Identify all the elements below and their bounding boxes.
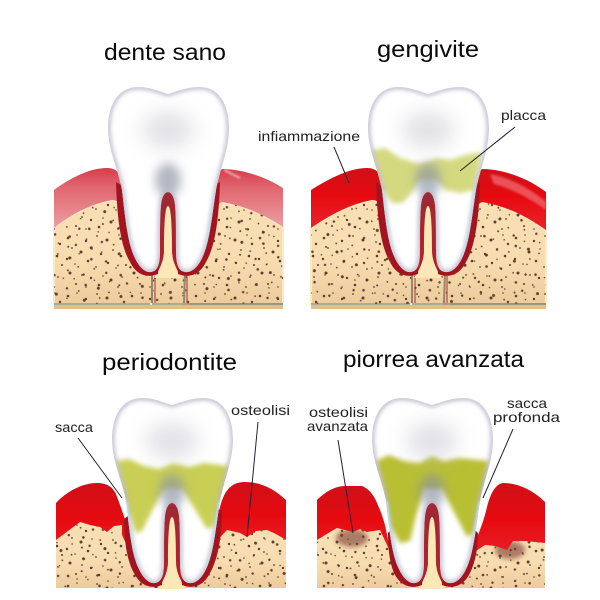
- base band: [311, 304, 546, 309]
- label: osteolisi: osteolisi: [231, 402, 290, 418]
- tooth: [108, 87, 229, 278]
- panel: gengivite: [258, 36, 546, 309]
- label: placca: [460, 107, 546, 171]
- label: infiammazione: [258, 128, 360, 183]
- nerve lines: [311, 272, 546, 304]
- heading: piorrea avanzata: piorrea avanzata: [343, 346, 524, 372]
- label: osteolisi avanzata: osteolisi: [309, 404, 368, 420]
- panel: periodontite: [55, 349, 290, 589]
- heading: gengivite: gengivite: [377, 36, 479, 62]
- inflamed gum left: [311, 168, 388, 228]
- gum glint: [224, 170, 240, 178]
- label: sacca: sacca: [55, 419, 93, 435]
- heading: dente sano: dente sano: [104, 39, 226, 65]
- bone lesion right: [495, 541, 525, 559]
- gum right: [466, 483, 545, 562]
- heading: periodontite: periodontite: [102, 349, 237, 375]
- label: placca: placca: [501, 107, 546, 123]
- label: sacca profonda: profonda: [493, 409, 560, 425]
- tooth with plaque: [112, 398, 233, 589]
- label: sacca profonda: [483, 395, 560, 498]
- bone: [56, 522, 286, 588]
- gum highlight: [490, 174, 546, 210]
- label: osteolisi avanzata: avanzata: [307, 418, 368, 434]
- bone lesion left: [336, 529, 368, 547]
- label: sacca: [55, 419, 122, 498]
- gum left: [54, 168, 128, 228]
- bone: [311, 200, 546, 304]
- bone: [54, 200, 283, 304]
- panel: dente sano: [54, 39, 283, 309]
- label: osteolisi avanzata: [307, 404, 368, 533]
- nerve lines: [54, 272, 283, 304]
- gum left: [56, 483, 134, 560]
- label: osteolisi: [231, 402, 290, 537]
- label: sacca profonda: sacca: [507, 395, 547, 411]
- base band: [54, 304, 283, 309]
- gum right: [208, 482, 286, 555]
- tooth with plaque: [372, 398, 493, 589]
- label: infiammazione: infiammazione: [258, 128, 360, 144]
- gum right: [210, 169, 283, 227]
- panel: piorrea avanzata: [307, 346, 560, 589]
- inflamed gum right: [470, 169, 546, 230]
- gum left: [317, 486, 394, 560]
- bone: [317, 528, 545, 588]
- tooth with plaque: [368, 87, 489, 278]
